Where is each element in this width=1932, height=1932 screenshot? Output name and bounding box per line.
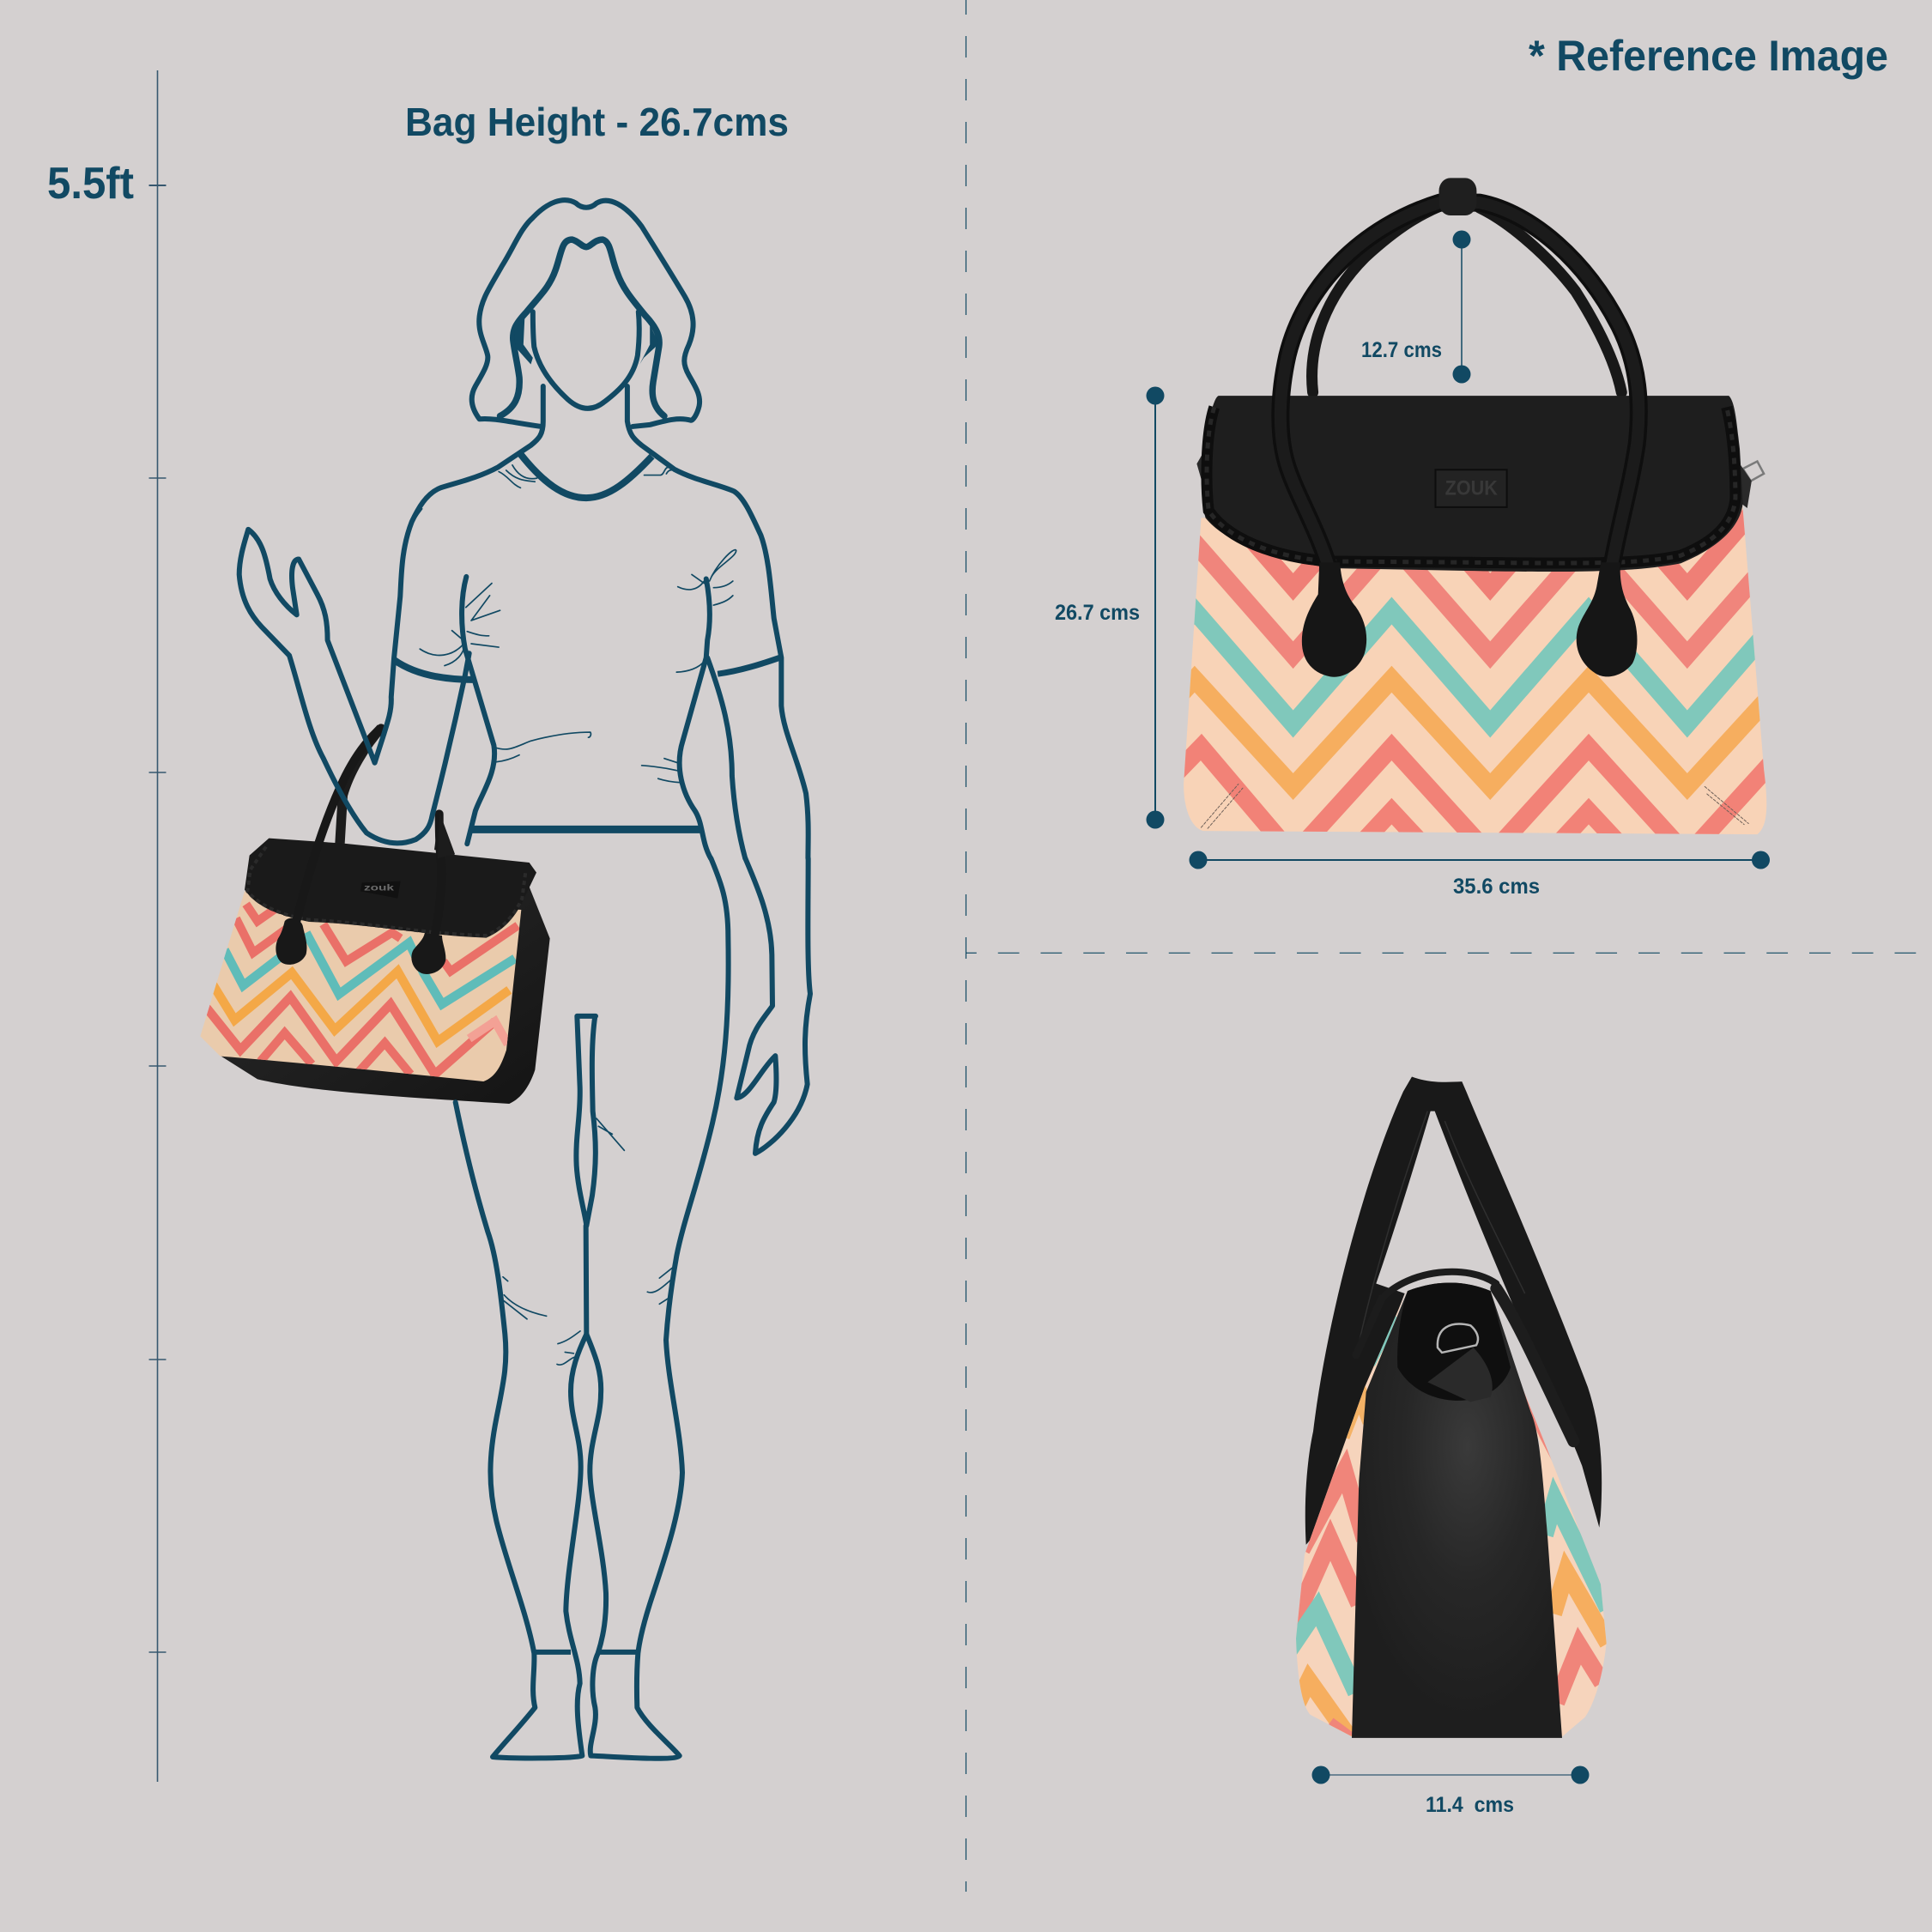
dimension: bag width <box>1190 851 1770 899</box>
left leg <box>456 1102 586 1758</box>
thigh gap <box>576 1016 596 1226</box>
small bag right handle tab <box>411 933 445 974</box>
height ruler <box>149 70 167 1782</box>
small bag fabric <box>200 891 521 1081</box>
heading: reference image: * Reference Image <box>1529 32 1888 80</box>
braided flap top <box>1382 1272 1496 1299</box>
side handles <box>1305 1076 1602 1545</box>
small bag label <box>360 881 401 899</box>
neck and shoulders with raised left arm <box>239 386 543 843</box>
dimension: bag height <box>1055 386 1164 829</box>
small bag back handle <box>340 728 381 844</box>
right leg and inner thigh <box>586 858 729 1759</box>
corner stitching <box>1201 784 1748 828</box>
shirt hem <box>471 826 701 833</box>
small bag front left handle <box>290 728 381 944</box>
braided flap right edge <box>1496 1288 1573 1441</box>
black side panel <box>1352 1282 1562 1738</box>
front handle outline <box>1281 203 1638 572</box>
right sleeve band <box>718 657 782 674</box>
flap logo patch: ZOUK <box>1445 475 1498 500</box>
dimension: handle height <box>1361 230 1471 383</box>
left chevrons <box>1296 1316 1396 1736</box>
small bag right rear handle <box>434 813 455 856</box>
side strap tab <box>1196 454 1752 508</box>
shadow under flap <box>1397 1282 1511 1401</box>
right inner arm <box>707 657 745 858</box>
small bag flap <box>245 839 536 938</box>
ruler label: 5.5ft <box>47 159 134 209</box>
braided flap edge <box>1207 407 1735 563</box>
face <box>533 312 639 409</box>
black flap <box>1202 396 1743 572</box>
right fabric panel <box>1482 1288 1607 1738</box>
dimension: bag depth: 11.4 cms <box>1426 1793 1514 1817</box>
hair inner <box>500 239 664 416</box>
shirt wrinkles <box>403 465 736 783</box>
small bag label: zouk <box>364 883 395 893</box>
dimension: bag width: 35.6 cms <box>1453 875 1540 899</box>
collar <box>520 454 652 498</box>
small bag left handle tab <box>276 918 307 965</box>
flap logo patch <box>1435 469 1507 507</box>
right shoulder and arm <box>627 386 809 858</box>
horizontal dashed divider <box>966 952 1932 954</box>
small bag carried by figure <box>200 728 550 1104</box>
left handle tab <box>1302 562 1366 677</box>
main bag front view <box>1184 178 1766 834</box>
dimension: handle height: 12.7 cms <box>1361 338 1442 362</box>
small bag chevrons <box>206 901 518 1075</box>
rear handle <box>1312 205 1621 392</box>
left sleeve band <box>394 660 472 680</box>
ankle bands <box>534 1650 638 1655</box>
leg wrinkles <box>503 1118 672 1365</box>
figure outline: upper body <box>239 200 809 858</box>
left fabric panel <box>1296 1288 1408 1738</box>
strap loop <box>1427 1348 1493 1402</box>
heading: bag height: Bag Height - 26.7cms <box>405 100 789 144</box>
front handle highlight <box>1281 203 1638 572</box>
vertical dashed divider <box>965 0 966 1892</box>
ears <box>514 318 658 364</box>
hair outer <box>472 200 700 427</box>
right hand <box>736 858 810 1154</box>
figure outline: legs and right hand <box>456 858 810 1759</box>
fabric body <box>1184 499 1766 834</box>
metal ring <box>1438 1324 1478 1353</box>
small bag right handle overlap <box>438 812 455 858</box>
chevron stripes <box>1184 509 1765 834</box>
right chevrons <box>1523 1390 1607 1706</box>
right torso side <box>680 578 711 858</box>
handle seams <box>1359 1111 1525 1342</box>
shoulder ring <box>1743 462 1764 481</box>
right handle tab <box>1577 562 1637 676</box>
left torso side <box>462 577 494 844</box>
small bag black gusset <box>221 873 550 1104</box>
dimension: bag depth <box>1311 1766 1590 1817</box>
small bag braided edge <box>247 847 526 936</box>
dimension: bag height: 26.7 cms <box>1055 601 1140 625</box>
handle top keeper <box>1439 178 1476 215</box>
small bag front right handle <box>429 814 441 957</box>
left braid tail <box>1356 1299 1382 1355</box>
side view bag <box>1287 1076 1608 1747</box>
braid stitches <box>1207 407 1735 563</box>
